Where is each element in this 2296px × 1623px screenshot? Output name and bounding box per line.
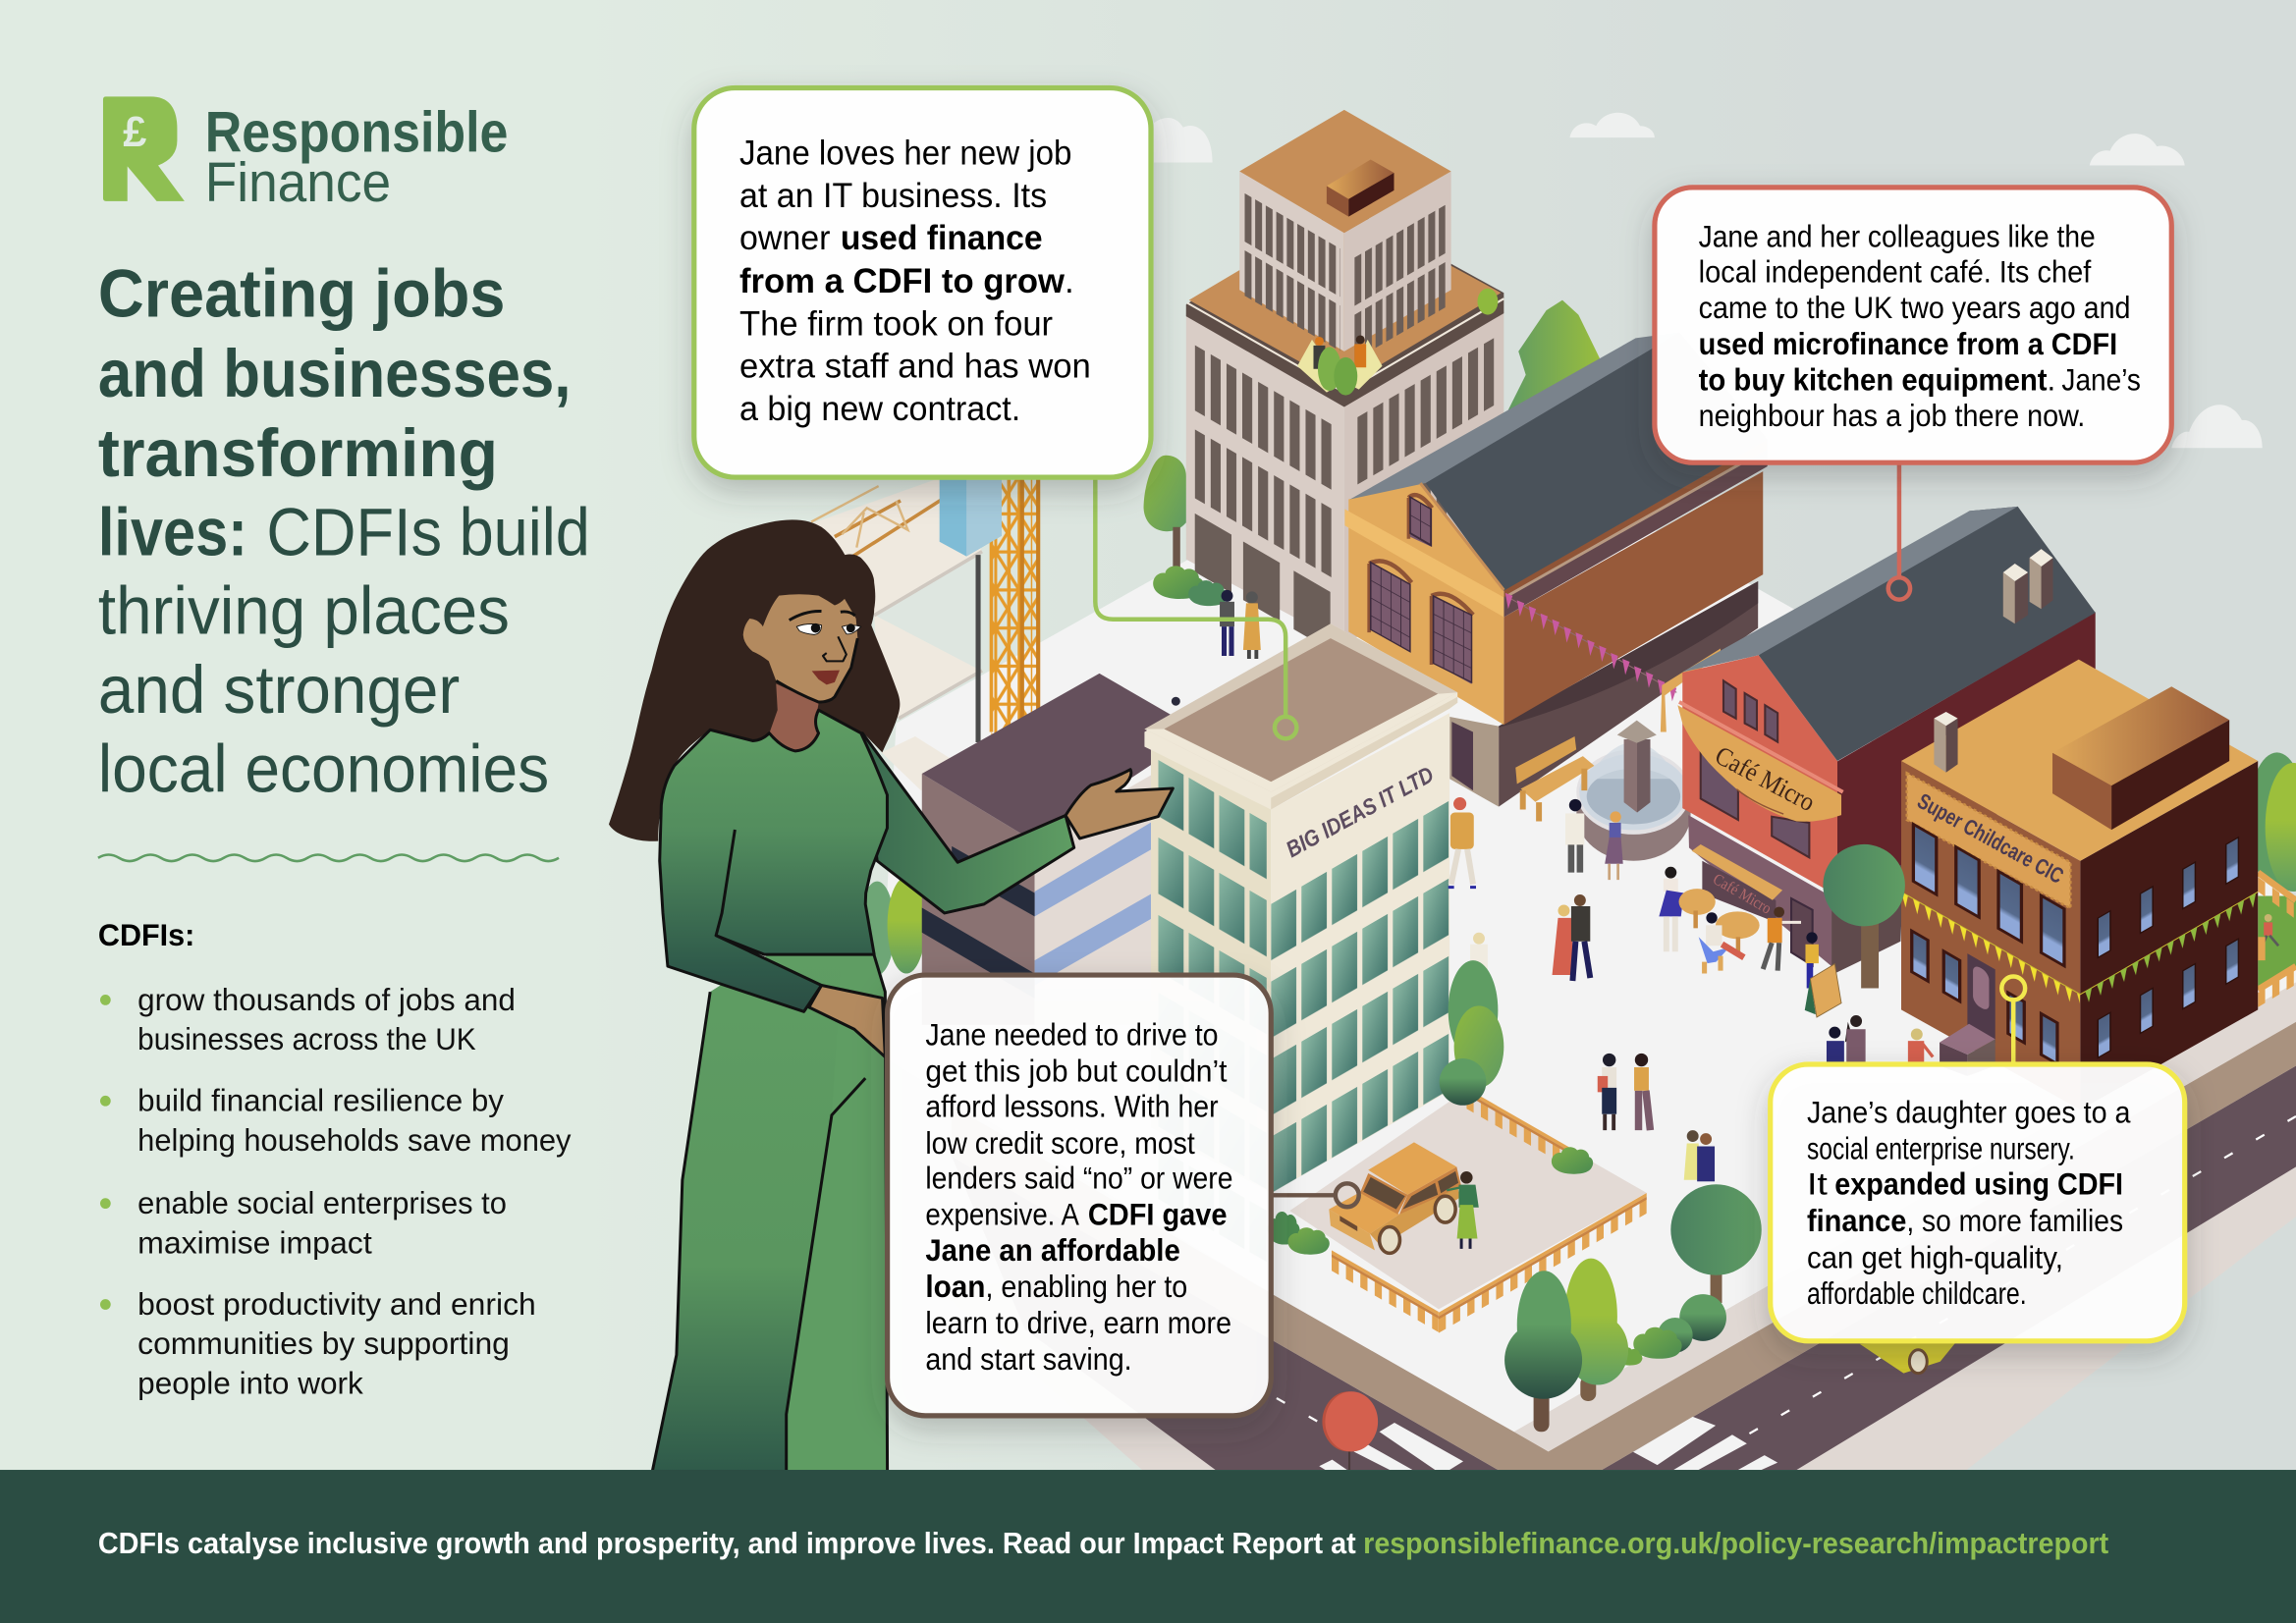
bullet: social enterprises: maximise impact: [137, 1225, 372, 1260]
red road sign: [1322, 1391, 1378, 1470]
callout: IT business: .: [1065, 262, 1074, 300]
callout: affordable loan: loan: [925, 1270, 985, 1304]
callout: café: Jane’s: [2061, 363, 2141, 398]
building parapet and roof: [1144, 623, 1457, 810]
bullet: jobs: [100, 983, 516, 1056]
Jane: [609, 519, 1173, 1472]
CDFIs list: [98, 918, 572, 1400]
man in orange vest and woman in yellow: [1763, 907, 1819, 988]
large round tree: [1711, 1268, 1722, 1303]
café banner: Café Micro: [1711, 740, 1820, 817]
childcare sign: Super Childcare CIC: [1913, 788, 2067, 889]
callout: nursery: finance: [1807, 1204, 1906, 1238]
trees behind Jane: [859, 877, 925, 975]
bullet: productivity: people into work: [137, 1366, 363, 1400]
bushes beside car: [1268, 1212, 1300, 1245]
tower building: [1186, 110, 1503, 654]
tower upper walls: [1239, 171, 1344, 352]
bench: [1515, 736, 1594, 821]
walking couple: [1553, 894, 1590, 981]
childcare building: [1901, 660, 2258, 1109]
callout: nursery: It: [1807, 1167, 1828, 1202]
logo wordmark: Finance: [205, 152, 391, 214]
eaves band: [1503, 450, 1768, 617]
purple block building: [922, 674, 1201, 1025]
café tree: [1823, 844, 1905, 988]
title: and businesses,: [98, 336, 572, 411]
logo wordmark: [205, 100, 508, 214]
small Jane by car: [1447, 1171, 1477, 1249]
neck: [769, 683, 819, 751]
logo pound sign: £: [123, 109, 146, 156]
bullet: resilience: build financial resilience by: [137, 1084, 504, 1118]
man in yellow top: [1449, 797, 1476, 888]
couple by tower: [1220, 590, 1261, 659]
café tables and seated man: [1679, 889, 1760, 974]
bullet: social enterprises: enable social enterprises to: [137, 1186, 507, 1220]
callout: café: local independent café. Its chef: [1699, 254, 2092, 289]
list heading: CDFIs:: [98, 918, 194, 952]
windows: [1369, 495, 1473, 684]
left front fence: [1332, 1250, 1439, 1336]
café awning and shop sign: [1692, 844, 1782, 918]
title: transforming: [98, 415, 498, 491]
face: [743, 594, 857, 702]
callout: nursery: can get high-quality,: [1807, 1240, 2063, 1274]
red connector to café: [1888, 462, 1910, 600]
hand on hip: [809, 985, 885, 1057]
chimneys: [2003, 549, 2052, 623]
callout: affordable loan: get this job but couldn’t: [925, 1054, 1228, 1088]
callout: affordable loan: and start saving.: [925, 1342, 1132, 1377]
title: and stronger: [98, 652, 460, 728]
callout: café: .: [2048, 363, 2055, 398]
people in the plaza: [1220, 590, 1933, 1249]
title: lives:: [98, 494, 247, 569]
tower lower right wall: [1344, 310, 1503, 644]
logo mark: [103, 96, 185, 201]
front lime tree: [1580, 1377, 1596, 1401]
facial features: [790, 611, 861, 684]
childcare sign: [1907, 773, 2070, 908]
callout: café: used microfinance from a CDFI: [1699, 327, 2117, 361]
callout: affordable loan: learn to drive, earn more: [925, 1306, 1231, 1340]
bullet: productivity: [100, 1287, 536, 1400]
bullet: resilience: [100, 1084, 572, 1158]
A-board sign: [1805, 964, 1841, 1017]
callout: affordable loan: expensive. A: [925, 1197, 1079, 1231]
bullet: jobs: grow thousands of jobs and: [137, 983, 516, 1017]
callout: IT business: Jane loves her new job: [739, 135, 1071, 173]
callout: café: [1655, 188, 2171, 462]
callout: café: Jane and her colleagues like the: [1699, 220, 2096, 254]
BIG IDEAS IT LTD building: [1144, 623, 1457, 1262]
ground: light pavement edge: [1514, 983, 2296, 1451]
ground: road: [952, 1065, 2296, 1470]
title: thriving places: [98, 572, 510, 648]
callout: café: neighbour has a job there now.: [1699, 399, 2085, 433]
tower parapet and terrace: [1186, 205, 1503, 407]
logo wordmark: Responsible: [205, 100, 508, 164]
callout: IT business: The firm took on four: [739, 304, 1053, 343]
callout: affordable loan: CDFI gave: [1088, 1197, 1228, 1231]
callout: nursery: affordable childcare.: [1807, 1276, 2027, 1311]
bullet: resilience: helping households save money: [137, 1123, 572, 1158]
hair: [609, 519, 900, 841]
title: [98, 256, 590, 806]
bullet: social enterprises: [100, 1186, 507, 1260]
building sign: BIG IDEAS IT LTD: [1282, 761, 1438, 862]
terrace people and bush: [1297, 289, 1498, 396]
café awning and shop sign: Café Micro: [1710, 869, 1775, 918]
wavy divider: [98, 854, 559, 861]
front bushes: [1679, 1294, 1726, 1341]
outstretched sleeve: [862, 733, 1074, 913]
yard with fence: [1289, 1088, 1647, 1337]
bullet: productivity: boost productivity and enrich: [137, 1287, 536, 1322]
callout: nursery: social enterprise nursery.: [1807, 1131, 2075, 1165]
couple near tree: [1684, 1130, 1715, 1181]
callout: affordable loan: low credit score, most: [925, 1126, 1195, 1161]
road markings: [1277, 1116, 2296, 1470]
right wall with windows: [1271, 713, 1449, 1193]
woman at café table: [1659, 867, 1684, 951]
bullet: productivity: communities by supporting: [137, 1326, 510, 1361]
café roof: [1759, 507, 2096, 761]
café building: [1677, 507, 2096, 975]
childcare right windows: [2098, 838, 2238, 1057]
orange building: [1344, 332, 1768, 807]
callout: IT business: a big new contract.: [739, 390, 1020, 428]
callout: café: to buy kitchen equipment: [1699, 363, 2048, 398]
tower lower left wall: [1186, 313, 1344, 644]
car: [1329, 1142, 1461, 1253]
yellow car on road: [1860, 1338, 1959, 1374]
callout: café: came to the UK two years ago and: [1699, 291, 2131, 325]
man and woman at fountain: [1565, 799, 1623, 880]
fountain and benches: [1515, 649, 1721, 861]
callout connectors: [1095, 462, 2025, 1207]
callout: nursery: , so more families: [1906, 1204, 2123, 1238]
callout: IT business: [694, 87, 1151, 477]
brown connector to car: [1271, 1183, 1359, 1207]
bench behind café: [1661, 649, 1721, 732]
callout: nursery: Jane’s daughter goes to a: [1807, 1096, 2131, 1130]
café banner: [1677, 702, 1843, 822]
tower roof: [1239, 110, 1451, 233]
logo: [103, 96, 508, 214]
ground: pavement plaza: [879, 505, 2296, 1432]
callout: nursery: [1771, 1064, 2185, 1341]
callout: affordable loan: lenders said “no” or were: [925, 1162, 1232, 1196]
callout: affordable loan: Jane needed to drive to: [925, 1018, 1219, 1053]
entrance steps: [1940, 1024, 1995, 1076]
yellow and green bunting: [1901, 892, 2258, 1009]
callout: IT business: used finance: [841, 219, 1043, 257]
café windows: [1701, 680, 1813, 965]
title: CDFIs build: [266, 494, 590, 569]
chimney: [1934, 712, 1958, 773]
roof: [1426, 332, 1768, 591]
callout: affordable loan: , enabling her to: [985, 1270, 1187, 1304]
left wall with windows: [1151, 739, 1271, 1193]
group by nursery: [1827, 1015, 1933, 1064]
top: [660, 710, 887, 1011]
side wall: [1503, 471, 1763, 725]
trousers: [652, 955, 888, 1472]
front dark tree: [1534, 1391, 1550, 1432]
plaza trees and bushes: [1268, 960, 1762, 1432]
title: Creating jobs: [98, 256, 505, 332]
callout: affordable loan: Jane an affordable: [925, 1233, 1180, 1268]
lower side wall: [1499, 581, 1758, 807]
callout: affordable loan: [888, 975, 1271, 1416]
tree by building: [1449, 960, 1498, 1060]
callout: IT business: extra staff and has won: [739, 348, 1091, 386]
callout: affordable loan: afford lessons. With her: [925, 1090, 1219, 1124]
cone tree behind orange building: [1506, 300, 1605, 412]
callout: IT business: from a CDFI to grow: [739, 262, 1066, 300]
roof box: [1327, 160, 1394, 217]
right-hand garden and trees: [2248, 752, 2296, 1007]
roof box: [2052, 686, 2229, 830]
rear fence: [1466, 1088, 1570, 1173]
footer text: CDFIs catalyse inclusive growth and prosperity, and improve lives. Read our Impact Report at: [98, 1527, 1356, 1560]
front facade: [1348, 483, 1503, 725]
footer link: responsiblefinance.org.uk/policy-research/impactreport: [1363, 1527, 2108, 1560]
footer banner: [0, 1470, 2296, 1623]
green connector to Big Ideas: [1095, 477, 1296, 738]
cornice: [1344, 509, 1503, 617]
pointing hand: [1066, 770, 1173, 839]
yellow connector to nursery: [2001, 977, 2025, 1063]
bullet: jobs: businesses across the UK: [137, 1022, 476, 1056]
ground: kerb: [952, 1022, 2296, 1470]
right front fence: [1439, 1193, 1647, 1337]
two women in centre: [1598, 1054, 1650, 1130]
callout: IT business: at an IT business. Its: [739, 177, 1047, 215]
tree and bushes by tower: [1144, 456, 1228, 606]
callout: nursery: expanded using CDFI: [1834, 1167, 2123, 1202]
ground: beige outer strip: [937, 966, 2296, 1470]
construction site and crane: [811, 477, 1040, 790]
callout: IT business: owner: [739, 219, 831, 257]
man behind tree: [1470, 933, 1488, 977]
clouds: [1154, 113, 2263, 448]
pink bunting: [1505, 593, 1676, 701]
title: local economies: [98, 730, 549, 806]
childcare left windows: [1912, 821, 2064, 1082]
